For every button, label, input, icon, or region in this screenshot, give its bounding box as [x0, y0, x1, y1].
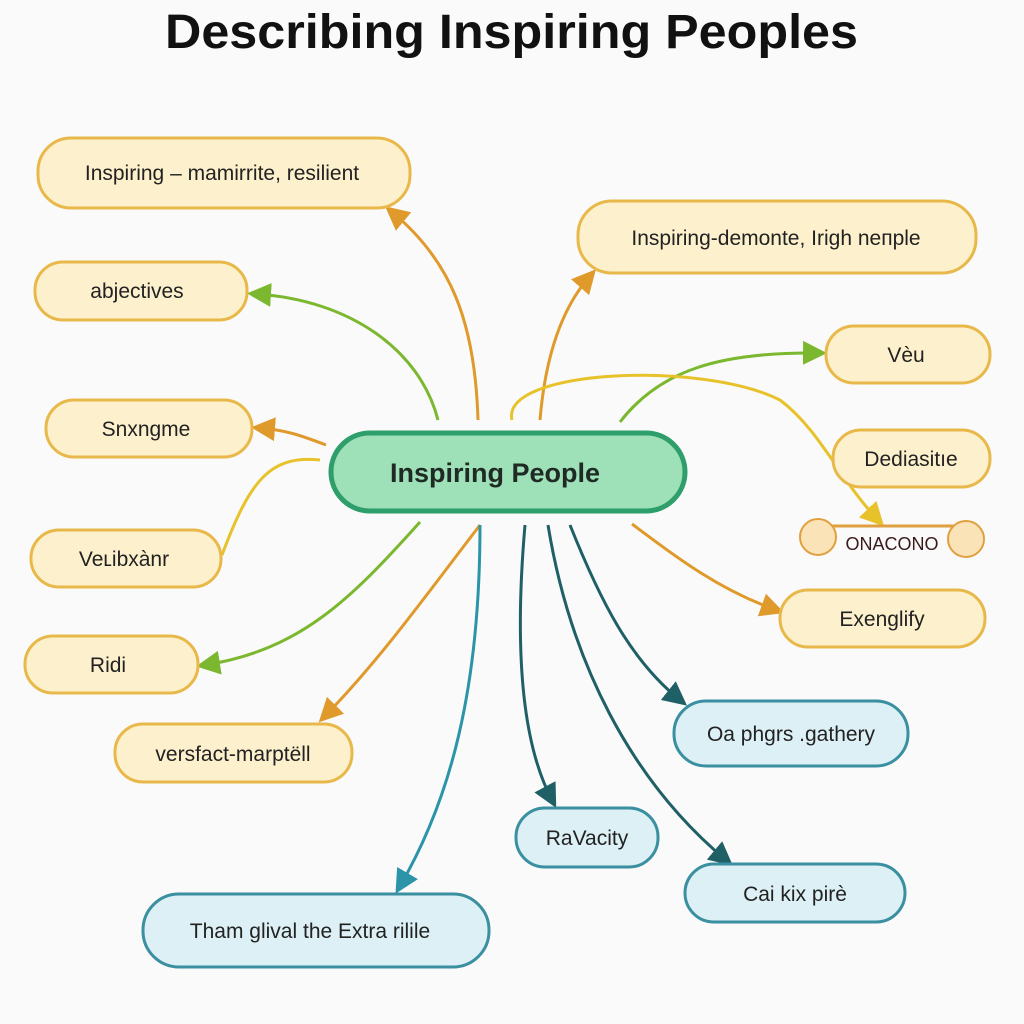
node: extra	[143, 894, 489, 967]
node: exenglify	[780, 590, 985, 647]
node: ridi	[25, 636, 198, 693]
node: gathery	[674, 701, 908, 766]
node: veu: Vèu	[887, 344, 925, 367]
nodes	[25, 138, 990, 967]
center node	[331, 433, 685, 511]
arrows	[205, 212, 878, 886]
node: ravacity: RaVacity	[546, 827, 629, 850]
node: demonte	[578, 201, 976, 273]
node: exenglify: Exenglify	[839, 608, 925, 631]
node: veu	[826, 326, 990, 383]
node: dediasitie: Dediasitıe	[864, 448, 958, 471]
node: dediasitie	[833, 430, 990, 487]
node: velibxanr: Veʟibxànr	[79, 548, 169, 571]
node: onacono: ONACONO	[845, 534, 939, 554]
node: snxngme: Snxngme	[102, 418, 190, 441]
center node: Inspiring People	[390, 458, 600, 488]
node: demonte: Inspiring-demonte, Irigh nепple	[631, 227, 921, 250]
node: abjectives	[35, 262, 247, 320]
node: resilient: Inspiring – mamirrite, resilient	[85, 162, 359, 185]
node: resilient	[38, 138, 410, 208]
node: abjectives: abjectives	[90, 280, 184, 303]
title: Describing Inspiring Peoples	[165, 6, 858, 59]
node: extra: Tham glival the Extra rilile	[190, 920, 430, 943]
node: versfact	[115, 724, 352, 782]
node: cai kix: Cai kix pirè	[743, 883, 847, 906]
node: velibxanr	[31, 530, 221, 587]
node: versfact: versfact-marptëll	[155, 743, 311, 766]
node: snxngme	[46, 400, 252, 457]
node: ridi: Ridi	[90, 654, 126, 677]
node: cai kix	[685, 864, 905, 922]
node: gathery: Oa phgrs .gathery	[707, 723, 876, 746]
node: onacono	[800, 519, 984, 557]
node: ravacity	[516, 808, 658, 867]
